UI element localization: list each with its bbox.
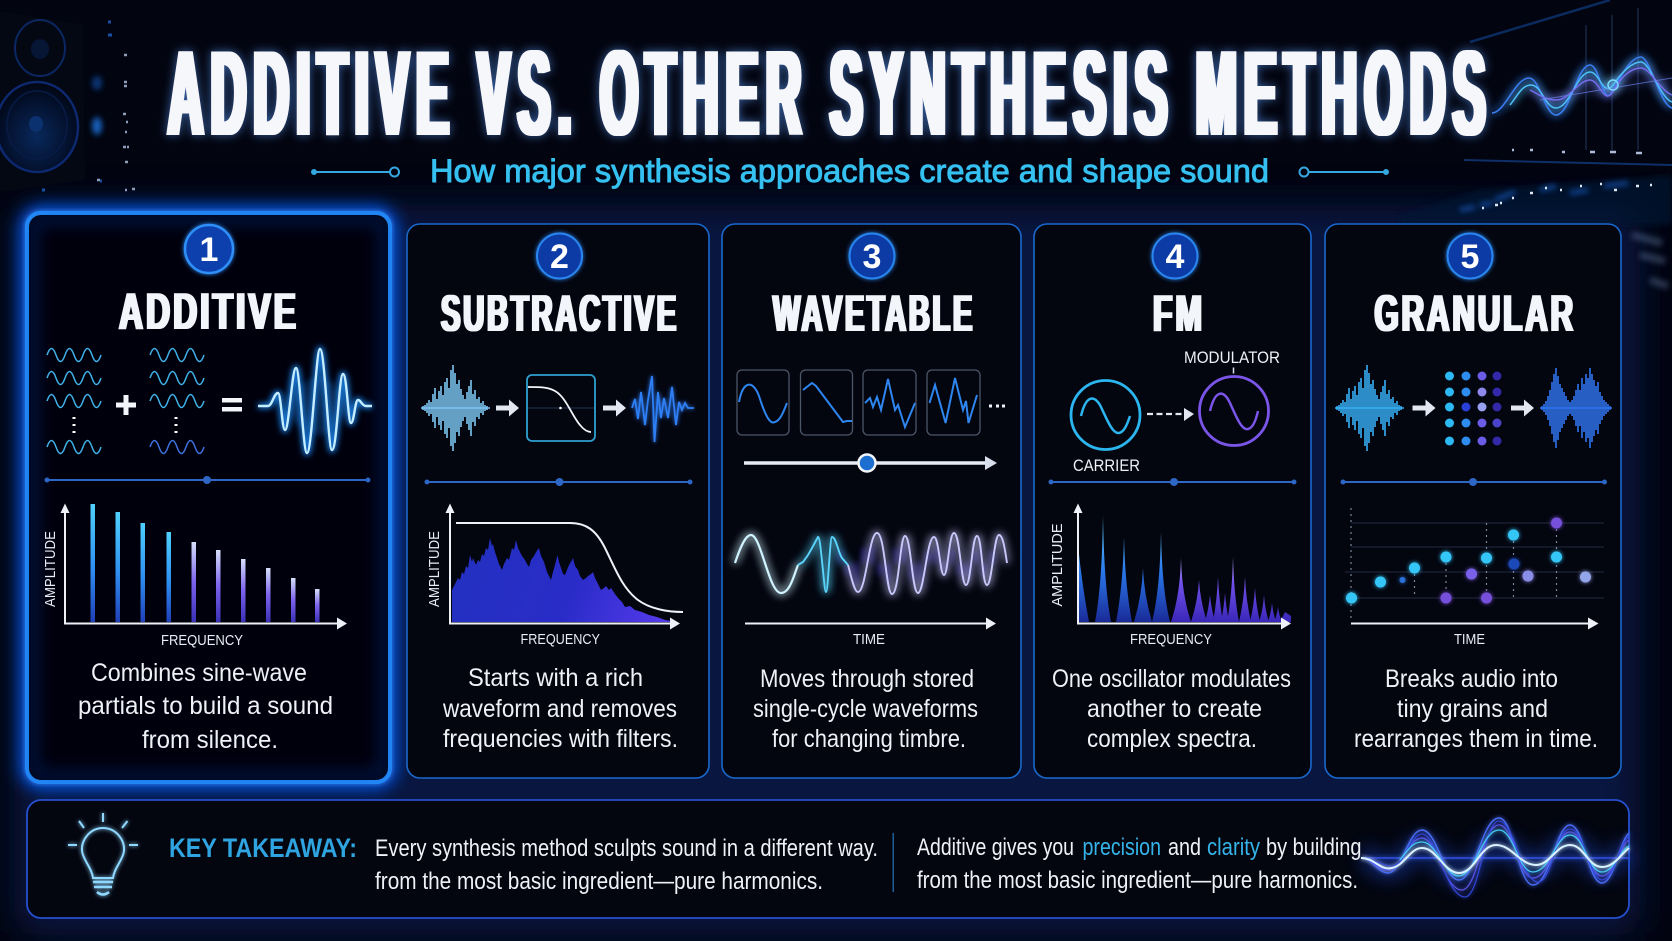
description: from silence. xyxy=(142,726,278,754)
icon: filtered waveform xyxy=(632,376,694,442)
axis label: amplitude: AMPLITUDE xyxy=(427,531,443,607)
subtitle ornament left xyxy=(312,168,399,176)
speaker decoration xyxy=(0,11,135,192)
icon: low-pass filter box xyxy=(527,375,595,441)
icon: resulting waveform xyxy=(258,349,372,453)
description: complex spectra. xyxy=(1087,725,1257,753)
description xyxy=(1354,665,1598,753)
badge 3 xyxy=(850,234,894,278)
axis label: amplitude: AMPLITUDE xyxy=(43,531,59,607)
description: partials to build a sound xyxy=(78,692,333,720)
badge 5: 5 xyxy=(1461,238,1479,276)
badge 4 xyxy=(1152,234,1198,278)
heading: additive: ADDITIVE xyxy=(119,283,299,341)
panel 2: subtractive xyxy=(407,224,709,778)
icon: partial sine waves left xyxy=(47,348,101,454)
heading: wavetable: WAVETABLE xyxy=(773,285,975,343)
badge 5 xyxy=(1448,234,1492,278)
badge 4: 4 xyxy=(1166,238,1185,276)
description: rearranges them in time. xyxy=(1354,725,1598,753)
text: takeaway left xyxy=(375,835,878,895)
chart: morphing waveform xyxy=(735,533,1007,594)
icon: wavetable frames xyxy=(737,370,1005,435)
axis label: time: TIME xyxy=(853,632,885,648)
icon: rearranged waveform xyxy=(1540,368,1612,448)
panel 3: wavetable xyxy=(722,224,1021,778)
panel: key takeaway xyxy=(27,800,1629,918)
description: Starts with a rich xyxy=(468,664,643,692)
axis label: time: TIME xyxy=(1454,632,1485,648)
text: takeaway right: clarity xyxy=(1207,834,1260,861)
time axis xyxy=(1351,618,1598,630)
badge 3: 3 xyxy=(863,238,881,276)
divider xyxy=(424,478,692,486)
description: Breaks audio into xyxy=(1385,665,1558,693)
text: takeaway left: from the most basic ingredient—pure harmonics. xyxy=(375,868,823,895)
badge 2: 2 xyxy=(550,238,569,276)
chart: harmonic partial bars xyxy=(90,504,320,622)
arrow xyxy=(1412,400,1436,416)
chart: grains over time xyxy=(1345,508,1604,622)
description: Combines sine-wave xyxy=(91,659,307,687)
description: Moves through stored xyxy=(760,665,974,693)
icon: plus and equals xyxy=(116,395,242,415)
slider xyxy=(744,454,997,472)
axis label: frequency: FREQUENCY xyxy=(520,632,600,648)
text: takeaway right: by building xyxy=(1266,834,1362,861)
panel backing glow xyxy=(15,205,1640,935)
text: takeaway right: precision xyxy=(1082,834,1161,861)
text: takeaway left: Every synthesis method sculpts sound in a different way. xyxy=(375,835,878,862)
divider xyxy=(44,476,370,484)
description: One oscillator modulates xyxy=(1052,665,1291,693)
subtitle: How major synthesis approaches create and shape sound xyxy=(430,153,1269,189)
axis label: frequency: FREQUENCY xyxy=(161,633,243,649)
description xyxy=(1052,665,1291,753)
label: carrier: CARRIER xyxy=(1073,457,1140,475)
mixing desk decoration xyxy=(1400,175,1672,286)
axis label: frequency: FREQUENCY xyxy=(1130,632,1212,648)
panel 1: additive xyxy=(27,213,390,782)
label: modulator: MODULATOR xyxy=(1184,349,1280,367)
icon: partial sine waves right xyxy=(150,348,204,454)
text: takeaway right xyxy=(917,834,1362,894)
subtitle ornament right xyxy=(1300,168,1388,176)
description xyxy=(78,659,333,754)
icon: grain dot grid xyxy=(1445,372,1502,446)
chart axes xyxy=(446,504,680,630)
description: another to create xyxy=(1087,695,1262,723)
text: takeaway right: and xyxy=(1168,834,1201,861)
panel 5: granular xyxy=(1325,224,1621,778)
label: key takeaway: KEY TAKEAWAY: xyxy=(169,833,357,863)
description: single-cycle waveforms xyxy=(753,695,978,723)
text: takeaway right: Additive gives you xyxy=(917,834,1074,861)
studio monitor decoration xyxy=(1464,0,1672,165)
axis label: amplitude: AMPLITUDE xyxy=(1050,523,1066,606)
icon: modulator oscillator xyxy=(1200,368,1268,446)
filter curve xyxy=(456,523,683,612)
icon: carrier oscillator xyxy=(1071,380,1140,450)
heading: fm: FM xyxy=(1153,285,1205,343)
arrow xyxy=(603,400,626,416)
description: for changing timbre. xyxy=(772,725,966,753)
heading: subtractive: SUBTRACTIVE xyxy=(441,285,679,343)
chart axes xyxy=(60,504,347,630)
arrow xyxy=(1511,400,1534,416)
panel 4: fm xyxy=(1034,224,1311,778)
description xyxy=(442,664,678,753)
text: takeaway right: from the most basic ingredient—pure harmonics. xyxy=(917,867,1358,894)
wave decoration xyxy=(1361,818,1629,897)
badge 1 xyxy=(185,225,233,273)
description: frequencies with filters. xyxy=(443,725,678,753)
icon: source waveform xyxy=(1335,365,1404,451)
divider xyxy=(1048,478,1296,486)
description: waveform and removes xyxy=(442,695,677,723)
time axis xyxy=(745,618,996,630)
arrow: dashed modulation xyxy=(1147,408,1194,421)
icon: rich waveform xyxy=(421,365,490,451)
description xyxy=(753,665,978,753)
badge 2 xyxy=(537,234,582,278)
description: tiny grains and xyxy=(1397,695,1548,723)
chart: fm spectrum xyxy=(1078,515,1291,622)
chart axes xyxy=(1074,504,1291,630)
arrow xyxy=(496,400,519,416)
separator xyxy=(892,833,894,892)
badge 1: 1 xyxy=(200,231,218,269)
chart: filtered spectrum xyxy=(452,538,677,622)
divider xyxy=(1340,478,1607,486)
icon: light bulb xyxy=(68,813,138,894)
